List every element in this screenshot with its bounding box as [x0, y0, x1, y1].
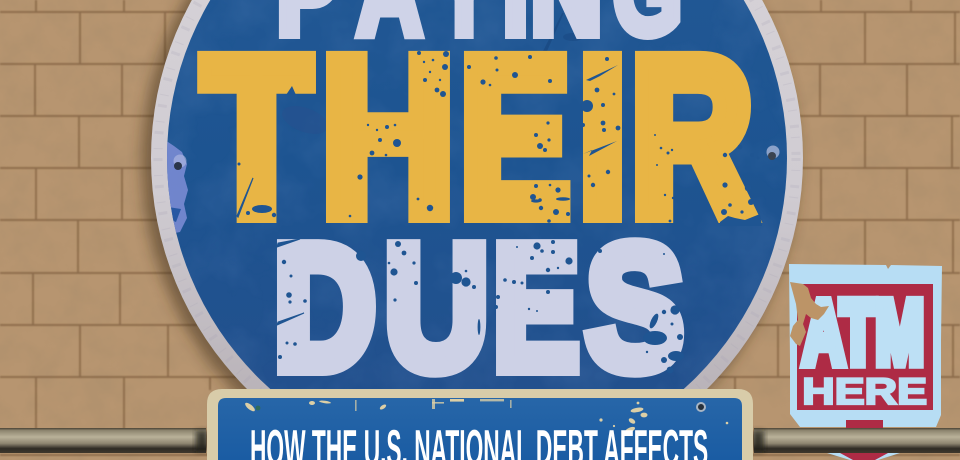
arrow head — [827, 453, 900, 460]
heading: DUES — [274, 208, 683, 406]
bolt left — [174, 154, 186, 170]
rust patch — [790, 282, 829, 346]
heading: THEIR — [202, 11, 754, 262]
arrow stem — [846, 420, 883, 429]
left wall pipe — [0, 428, 208, 453]
worn paint patch — [167, 142, 188, 233]
heading: THEIR: T — [202, 11, 311, 262]
heading: DUES: D — [274, 209, 376, 406]
red panel — [797, 284, 933, 410]
ATM label: ATM — [803, 283, 924, 382]
subtitle plate — [207, 389, 753, 460]
heading: DUES: S — [586, 210, 683, 406]
sign blue face — [167, 0, 787, 460]
HERE label: HERE — [802, 370, 927, 412]
paint chips on lettering — [237, 51, 762, 373]
scratches — [244, 399, 728, 434]
round sign: Paying Their Dues — [134, 0, 806, 389]
plate frame — [207, 389, 753, 460]
heading: THEIR: E — [460, 11, 570, 262]
ATM sign — [789, 264, 942, 460]
heading: THEIR: I — [578, 11, 627, 262]
sign rim — [151, 0, 803, 460]
bolt right — [766, 146, 780, 160]
heading: DUES: E — [493, 208, 579, 406]
heading: THEIR: H — [321, 11, 455, 262]
heading: PAYING — [276, 0, 682, 61]
heading: THEIR: R — [630, 13, 754, 262]
heading: DUES: U — [385, 209, 489, 406]
small bolt — [256, 406, 260, 410]
right wall pipe — [752, 428, 960, 453]
plate face — [218, 398, 742, 460]
plate bolt — [696, 402, 706, 412]
